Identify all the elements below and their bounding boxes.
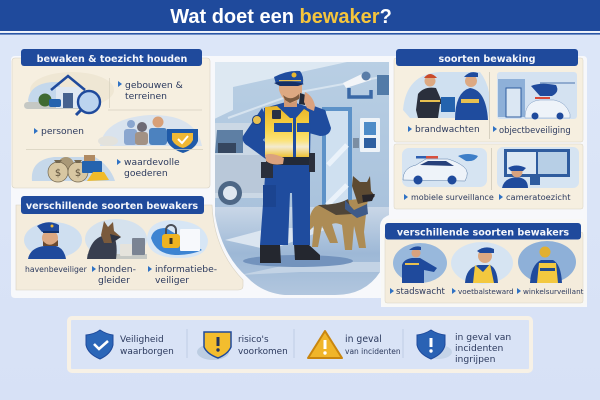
icon: geldzakken: $	[55, 168, 61, 179]
text: risicos voorkomen: voorkomen	[238, 347, 288, 357]
icon: geldzakken	[32, 155, 115, 182]
heading: verschillende soorten bewakers: verschillende soorten bewakers	[26, 201, 198, 212]
icon: havenbeveiliger	[24, 222, 82, 259]
icon: waarschuwingsdriehoek	[308, 331, 342, 358]
torso	[264, 102, 310, 153]
label: informatiebeveiliger	[148, 264, 217, 286]
label: hondengeleider	[92, 264, 136, 286]
text: personen: personen	[41, 126, 84, 137]
icon: schild met uitroepteken	[197, 332, 231, 360]
label: brandwachten: brandwachten	[415, 125, 480, 135]
icon: beveiligingscamera	[343, 72, 389, 97]
label: objectbeveiliging: objectbeveiliging	[499, 125, 571, 135]
boots	[260, 245, 281, 263]
label: informatiebeveiliger: informatiebe-	[155, 264, 217, 275]
label: hondengeleider: honden-	[98, 264, 136, 275]
icon: voetbalsteward	[451, 242, 513, 284]
icon: informatiebeveiliger	[147, 220, 208, 258]
vest	[265, 106, 309, 157]
label: stadswacht: stadswacht	[396, 287, 446, 297]
building	[212, 62, 392, 213]
icon: winkelsurveillant	[518, 241, 576, 283]
icon: geldzakken: $	[75, 168, 81, 179]
label: winkelsurveillant: winkelsurveillant	[523, 287, 584, 296]
panel: soorten bewaking	[394, 49, 583, 142]
icon: brandwachten	[403, 72, 490, 120]
white content backing	[11, 56, 587, 307]
left arm	[242, 108, 266, 160]
text: gebouwen en terreinen: gebouwen &	[125, 80, 183, 91]
label: informatiebeveiliger: veiliger	[155, 275, 189, 286]
icon: objectbeveiliging	[497, 72, 577, 120]
label: voetbalsteward: voetbalsteward	[458, 287, 514, 296]
text: gebouwen en terreinen: terreinen	[125, 91, 167, 102]
phone and hand	[299, 93, 306, 105]
text: gebouwen en terreinen	[118, 80, 183, 102]
label: mobiele surveillance: mobiele surveillance	[411, 193, 494, 202]
icon: toegangspaneel	[353, 118, 380, 152]
van	[212, 123, 267, 205]
label: havenbeveiliger: havenbeveiliger	[25, 265, 88, 274]
illustration: hond	[308, 176, 375, 250]
belt	[266, 157, 310, 165]
heading: soorten bewaking	[396, 49, 578, 66]
text: in geval van incidenten: van incidenten	[345, 347, 401, 356]
text: risicos voorkomen: risico's	[238, 335, 269, 345]
heading: bewaken en toezicht houden	[21, 49, 202, 66]
panel: verschillende soorten bewakers rechts	[381, 219, 587, 307]
head	[284, 99, 297, 107]
icon: stadswacht	[393, 243, 447, 283]
icon: hondengeleider	[85, 219, 147, 259]
heading: verschillende soorten bewakers	[385, 223, 581, 240]
text: in geval van incidenten ingrijpen: in geval van	[455, 332, 511, 343]
label: hondengeleider: gleider	[98, 275, 130, 286]
icon: blauw schild	[417, 330, 452, 359]
heading: soorten bewaking: soorten bewaking	[439, 54, 536, 65]
text: in geval van incidenten ingrijpen: incidenten	[455, 343, 504, 354]
heading: bewaken en toezicht houden: bewaken & toezicht houden	[37, 54, 188, 65]
icon: personen met schild	[98, 115, 202, 153]
ground	[212, 207, 392, 300]
icon: gebouw met vergrootglas	[24, 72, 114, 115]
text: waardevolle goederen: waardevolle	[124, 157, 180, 168]
label: cameratoezicht: cameratoezicht	[506, 192, 571, 202]
text: veiligheid waarborgen: Veiligheid	[120, 335, 164, 345]
text: veiligheid waarborgen: waarborgen	[120, 347, 174, 357]
icon: cameratoezicht	[497, 147, 579, 188]
panel: kernpunten onderaan	[69, 318, 531, 371]
icon: schild met vinkje	[86, 330, 113, 359]
title: Wat doet een bewaker?	[170, 6, 392, 28]
title banner	[0, 0, 600, 35]
central illustration: bewaker met hond	[212, 60, 392, 300]
text: in geval van incidenten ingrijpen: ingrijpen	[455, 354, 496, 365]
trousers	[260, 163, 310, 245]
text: in geval van incidenten: in geval	[345, 334, 382, 345]
hand on belt	[265, 154, 284, 165]
text: waardevolle goederen	[117, 157, 180, 179]
heading: verschillende soorten bewakers: verschillende soorten bewakers	[397, 228, 569, 238]
panel: mobiele surveillance en cameratoezicht	[394, 144, 583, 209]
cap	[274, 71, 303, 84]
illustration: bewaker	[243, 71, 331, 263]
icon: mobiele surveillance	[402, 148, 487, 187]
card: brandwachten en objectbeveiliging	[394, 58, 583, 142]
panel: verschillende soorten bewakers links	[16, 196, 243, 290]
panel: bewaken en toezicht houden	[12, 49, 210, 188]
heading: verschillende soorten bewakers	[21, 196, 204, 214]
right arm	[310, 106, 331, 136]
text: waardevolle goederen: goederen	[124, 168, 168, 179]
